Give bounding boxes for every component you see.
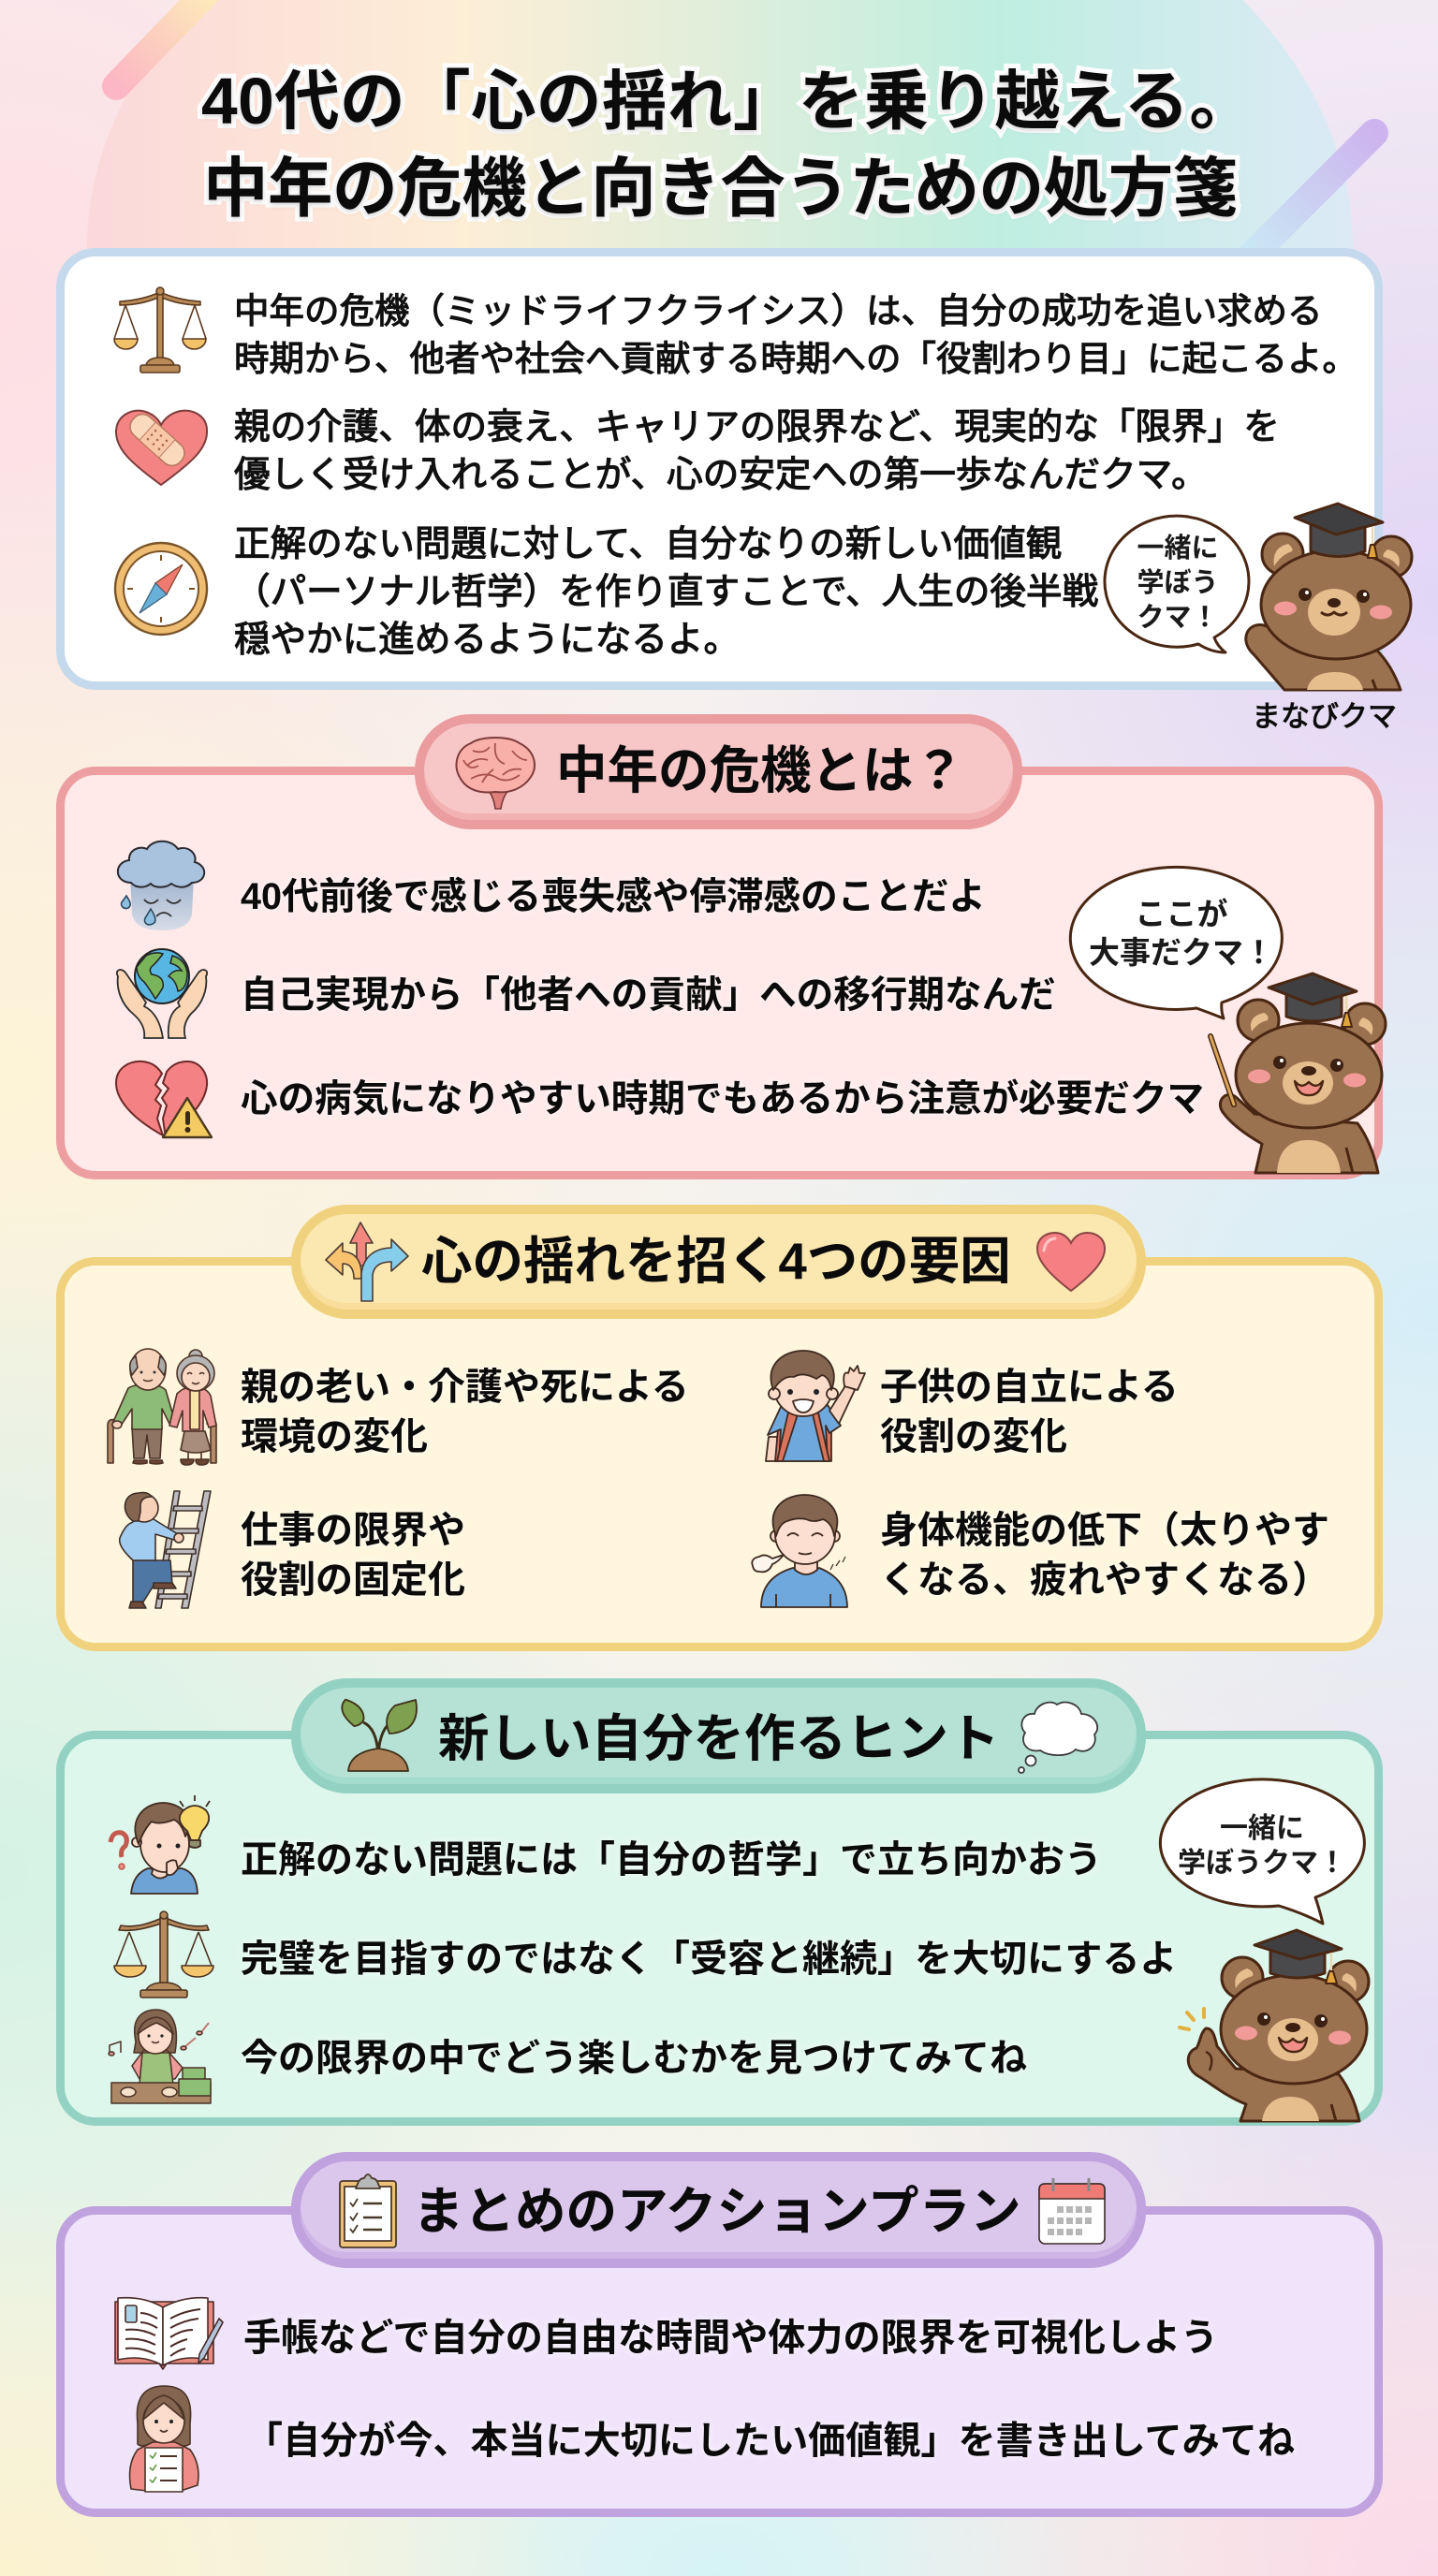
icon: balance scale small [113, 1910, 214, 1998]
title [198, 63, 1255, 225]
text: accept limits line 2: 優しく受け入れることが、心の安定への第一歩なんだクマ。 [234, 455, 1208, 495]
icon: heart [1036, 1232, 1106, 1292]
text: body decline: 身体機能の低下（太りやす [880, 1510, 1329, 1551]
title: 中年の危機と向き合うための処方箋 [203, 152, 1238, 225]
icon: elderly couple [107, 1348, 217, 1466]
text: sense of loss: 40代前後で感じる喪失感や停滞感のことだよ [241, 876, 986, 917]
text: role transition: 中年の危機（ミッドライフクライシス）は、自分の成功を追い求める [234, 291, 1322, 330]
text: work limits: 仕事の限界や [241, 1510, 465, 1551]
icon: globe in hands [116, 948, 208, 1039]
text: child independence line 2: 役割の変化 [880, 1416, 1067, 1457]
icon: open notebook and pen [114, 2297, 224, 2370]
bear mascot: waving [1244, 502, 1414, 691]
icon: tired man [751, 1494, 848, 1608]
speech bubble: let's learn: クマ！ [1137, 603, 1219, 633]
text: personal philosophy: 正解のない問題に対して、自分なりの新しい価値観 [234, 524, 1062, 564]
heading pill [415, 714, 1022, 829]
heading: 中年の危機とは？ [556, 742, 964, 799]
text: write down values: 「自分が今、本当に大切にしたい価値観」を書き出してみてね [245, 2421, 1295, 2462]
icon: balance scale [113, 286, 207, 373]
panel: action plan [56, 2152, 1383, 2517]
speech bubble: important: 大事だクマ！ [1089, 935, 1274, 970]
heading pill [291, 1678, 1146, 1793]
mascot name: まなびクマ [1252, 700, 1397, 733]
icon: thinking person [109, 1795, 211, 1895]
text: caution: 心の病気になりやすい時期でもあるから注意が必要だクマ [241, 1078, 1204, 1120]
speech bubble: learn together: 学ぼうクマ！ [1178, 1848, 1346, 1879]
icon: calendar [1038, 2178, 1106, 2245]
text: child independence: 子供の自立による [880, 1367, 1179, 1408]
text: work limits line 2: 役割の固定化 [241, 1559, 465, 1601]
heading pill [291, 1205, 1146, 1319]
text: acceptance: 完璧を目指すのではなく「受容と継続」を大切にするよ [241, 1939, 1177, 1980]
panel: intro [56, 248, 1414, 733]
bear mascot: pointing [1208, 972, 1387, 1174]
bear mascot: thumbs up [1178, 1928, 1371, 2123]
panel: what is midlife crisis [56, 714, 1387, 1179]
speech bubble: let's learn: 学ぼう [1137, 567, 1219, 598]
icon: thought cloud [1018, 1702, 1099, 1774]
panel: four causes [56, 1205, 1383, 1651]
text: body decline line 2: くなる、疲れやすくなる） [880, 1559, 1329, 1601]
icon: woman with checklist [129, 2385, 199, 2493]
text: parents aging line 2: 環境の変化 [241, 1416, 428, 1457]
icon: clipboard [339, 2174, 397, 2248]
speech bubble: important: ここが [1135, 897, 1228, 931]
icon: compass [114, 541, 208, 637]
icon: broken heart with warning [115, 1060, 213, 1138]
text: role transition line 2: 時期から、他者や社会へ貢献する時期への「役割わり目」に起こるよ。 [234, 339, 1357, 378]
icon: branching arrows [325, 1222, 409, 1302]
text: visualize time: 手帳などで自分の自由な時間や体力の限界を可視化しよう [243, 2318, 1218, 2359]
icon: rain cloud [116, 841, 206, 930]
title: 40代の「心の揺れ」を乗り越える。 [201, 65, 1255, 138]
speech bubble: learn together: 一緒に [1220, 1813, 1304, 1844]
icon: sprout [341, 1698, 418, 1772]
icon: brain [455, 737, 536, 810]
icon: boy with backpack [765, 1350, 866, 1462]
text: personal philosophy line 3: 穏やかに進めるようになるよ。 [234, 620, 740, 660]
heading: まとめのアクションプラン [413, 2183, 1021, 2240]
heading pill [291, 2152, 1146, 2268]
text: enjoy within limits: 今の限界の中でどう楽しむかを見つけてみてね [241, 2038, 1027, 2079]
icon: heart with bandage [114, 410, 208, 487]
speech bubble: let's learn [1103, 515, 1251, 653]
speech bubble: important [1069, 865, 1284, 1020]
text: accept limits: 親の介護、体の衰え、キャリアの限界など、現実的な「限界」を [234, 407, 1280, 447]
icon: man on ladder [118, 1490, 212, 1609]
text: shift to contribution: 自己実現から「他者への貢献」への移行期なんだ [241, 974, 1056, 1016]
speech bubble: let's learn: 一緒に [1137, 533, 1219, 564]
text: personal philosophy line 2: （パーソナル哲学）を作り直すことで、人生の後半戦 [234, 572, 1098, 612]
heading: 心の揺れを招く4つの要因 [421, 1233, 1011, 1290]
heading: 新しい自分を作るヒント [438, 1710, 1000, 1767]
speech bubble: learn together [1159, 1778, 1366, 1925]
panel: hints [56, 1678, 1383, 2126]
text: own philosophy: 正解のない問題には「自分の哲学」で立ち向かおう [241, 1839, 1102, 1881]
icon: cooking woman [108, 2009, 212, 2104]
text: parents aging: 親の老い・介護や死による [241, 1367, 689, 1408]
